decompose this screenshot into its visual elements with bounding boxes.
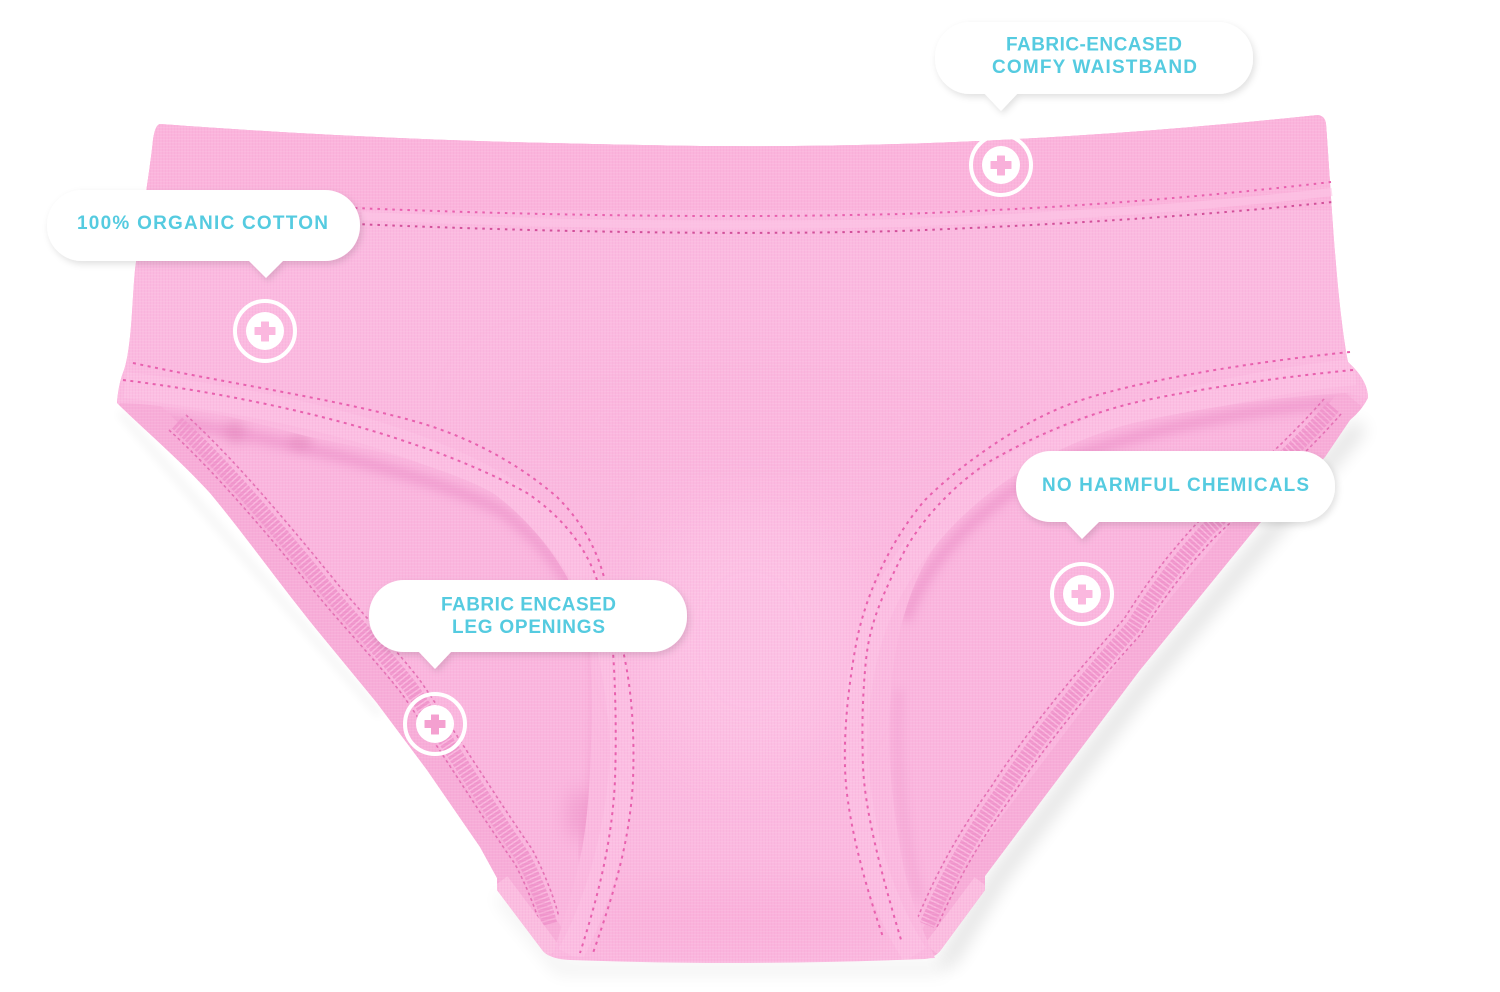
callout: fabric-encased comfy waistband: FABRIC-ENCASED [1006, 34, 1182, 56]
fabric shading [146, 115, 1332, 925]
left leg overlock seam [177, 423, 550, 925]
left seam stitches [169, 415, 559, 932]
icon: plus button leg opening [405, 694, 465, 754]
bottom corner folds [497, 884, 550, 955]
callout: fabric-encased comfy waistband [935, 22, 1253, 111]
inner hem shadows [169, 412, 568, 580]
icon: plus button chemicals [1052, 564, 1112, 624]
icon: plus button cotton [235, 301, 295, 361]
underwear garment [100, 100, 1400, 980]
callout: no harmful chemicals [1016, 451, 1335, 539]
callout: 100% organic cotton: 100% ORGANIC COTTON [77, 213, 328, 234]
callout: fabric encased leg openings [369, 580, 687, 669]
callout: 100% organic cotton [47, 190, 360, 278]
knit texture [168, 400, 1341, 926]
left binding strip [120, 403, 550, 955]
icon: plus button waistband [971, 135, 1031, 195]
back panel and interior [100, 100, 1390, 980]
callout: no harmful chemicals: NO HARMFUL CHEMICALS [1042, 475, 1309, 496]
waistband stitching [355, 182, 1332, 233]
callout: fabric encased leg openings: LEG OPENINGS [452, 617, 605, 638]
right leg overlock seam [927, 407, 1333, 925]
callout: fabric-encased comfy waistband: COMFY WAISTBAND [992, 57, 1197, 78]
right hem stitching [845, 352, 1353, 943]
left hem stitching [123, 363, 633, 953]
waistband seam highlight [362, 192, 1332, 225]
callout: fabric encased leg openings: FABRIC ENCASED [441, 594, 616, 616]
front panel [117, 115, 1368, 962]
right binding strip [935, 405, 1360, 955]
garment drop shadow [120, 412, 1360, 968]
right seam stitches [918, 399, 1341, 932]
